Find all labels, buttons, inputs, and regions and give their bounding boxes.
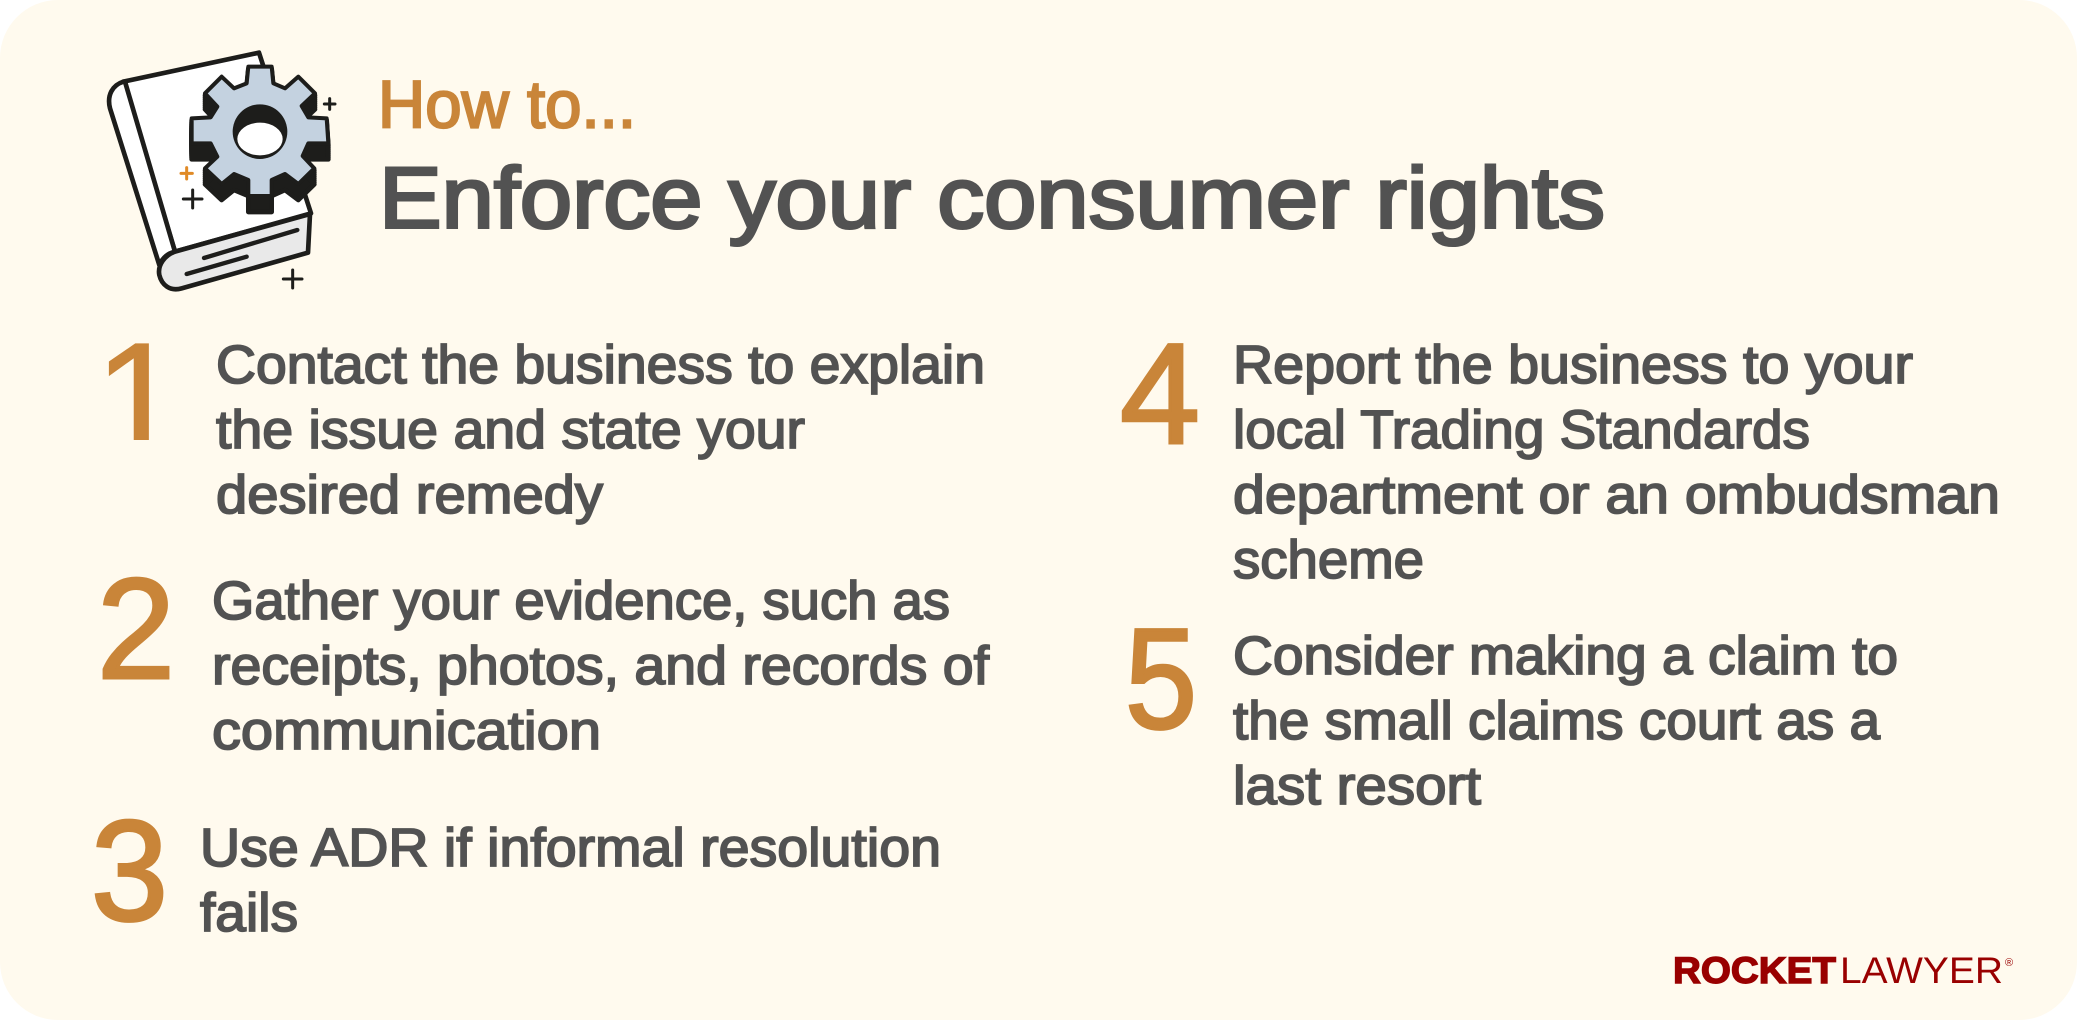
step 2 [97,550,990,761]
step 5: last resort [1233,756,1481,816]
step 2: communication [212,701,601,761]
step 4: department or an ombudsman [1233,465,2000,525]
step 2: Gather your evidence, such as [212,571,950,631]
step 5: Consider making a claim to [1233,626,1898,686]
logo: Rocket Lawyer: ® [2005,957,2013,969]
step 5 [1125,600,1898,816]
step 1: Contact the business to explain [216,335,985,395]
logo: Rocket Lawyer [1673,949,2013,991]
step 5: 5 [1125,600,1197,759]
step 2: 2 [97,550,175,709]
logo: Rocket Lawyer: LAWYER [1840,949,2003,991]
heading: How to...: How to... [378,68,636,142]
step 3: Use ADR if informal resolution [200,818,941,878]
step 4: Report the business to your [1233,335,1913,395]
step 4: 4 [1120,315,1200,474]
step 4: local Trading Standards [1233,400,1810,460]
step 4: scheme [1233,530,1424,590]
step 1: 1 [94,309,183,488]
step 4 [1120,315,2000,590]
step 1: desired remedy [216,465,603,525]
step 3: 3 [91,792,168,951]
title: Enforce your consumer rights [379,150,1605,246]
step 2: receipts, photos, and records of [212,636,990,696]
step 1 [108,343,982,525]
step 3: fails [200,883,298,943]
icon: book with gear [109,53,335,289]
step 1: the issue and state your [216,400,805,460]
step 3 [91,792,941,951]
step 5: the small claims court as a [1233,691,1881,751]
logo: Rocket Lawyer: ROCKET [1673,949,1836,991]
